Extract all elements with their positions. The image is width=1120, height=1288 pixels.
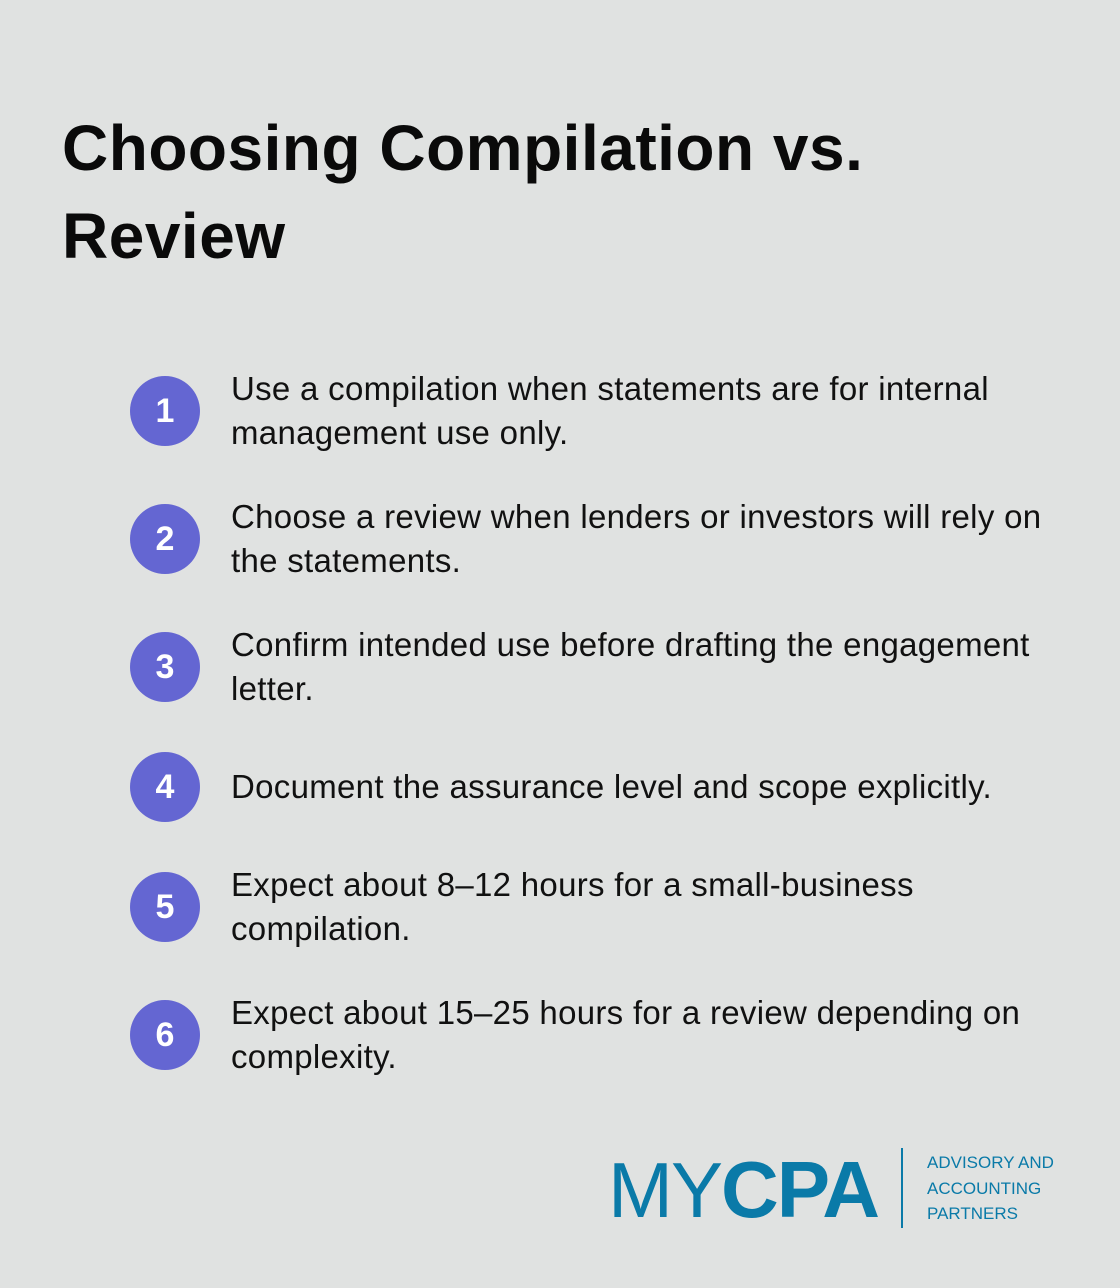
logo wordmark: MYCPA — [608, 1145, 878, 1234]
item 3 — [130, 626, 1030, 707]
text 6: complexity. — [231, 1038, 397, 1075]
text 5 — [231, 866, 914, 947]
text 3: Confirm intended use before drafting the engagement — [231, 626, 1030, 663]
badge 1 — [130, 376, 200, 446]
badge 2: 2 — [156, 520, 174, 558]
logo — [608, 1145, 1054, 1234]
text 6 — [231, 994, 1020, 1075]
logo tagline — [927, 1153, 1054, 1223]
text 1: Use a compilation when statements are for internal — [231, 370, 989, 407]
badge 1: 1 — [156, 392, 174, 430]
title: Review — [62, 200, 286, 272]
badge 2 — [130, 504, 200, 574]
text 2 — [231, 498, 1041, 579]
title: Choosing Compilation vs. — [62, 112, 863, 184]
logo tagline: ACCOUNTING — [927, 1178, 1041, 1198]
item 6 — [130, 994, 1020, 1075]
badge 5: 5 — [156, 888, 174, 926]
badge 5 — [130, 872, 200, 942]
badge 6: 6 — [156, 1016, 174, 1054]
text 1: management use only. — [231, 414, 568, 451]
text 2: the statements. — [231, 542, 461, 579]
text 5: compilation. — [231, 910, 411, 947]
logo tagline: PARTNERS — [927, 1204, 1018, 1223]
badge 4 — [130, 752, 200, 822]
item 5 — [130, 866, 914, 947]
text 1 — [231, 370, 989, 451]
badge 3 — [130, 632, 200, 702]
badge 3: 3 — [156, 648, 174, 686]
text 3 — [231, 626, 1030, 707]
title — [62, 112, 863, 272]
item 4 — [130, 752, 992, 822]
text 3: letter. — [231, 670, 314, 707]
badge 4: 4 — [156, 768, 174, 806]
text 6: Expect about 15–25 hours for a review depending on — [231, 994, 1020, 1031]
item 2 — [130, 498, 1041, 579]
badge 6 — [130, 1000, 200, 1070]
text 5: Expect about 8–12 hours for a small-business — [231, 866, 914, 903]
text 4: Document the assurance level and scope explicitly. — [231, 768, 992, 805]
item 1 — [130, 370, 989, 451]
logo tagline: ADVISORY AND — [927, 1153, 1054, 1172]
text 2: Choose a review when lenders or investors will rely on — [231, 498, 1041, 535]
